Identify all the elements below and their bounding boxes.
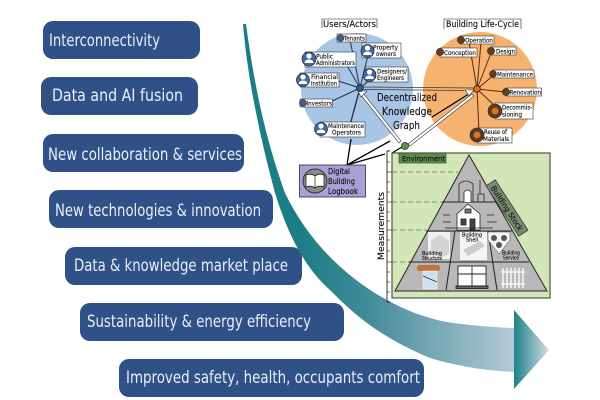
label: Reuse of Materials — [470, 128, 512, 143]
tag: Building Stock: Building Stock — [489, 184, 525, 233]
label: Financial Institution — [296, 73, 339, 88]
label: Public Administrators: Administrators — [316, 60, 355, 67]
axis label: Measurements: Measurements — [377, 192, 387, 260]
pill: Interconnectivity: Interconnectivity — [49, 31, 160, 51]
heading: Users/Actors: Users/Actors — [323, 20, 376, 30]
pill: Data and knowledge market place — [65, 247, 302, 285]
label: Public Administrators — [302, 52, 356, 67]
pill: New collaboration and services — [43, 134, 244, 172]
pill: Improved safety, health, occupants comfort — [119, 359, 424, 397]
label: Financial Institution: Financial — [311, 74, 338, 81]
image: building shell: Shell — [466, 238, 478, 244]
image: building structure: Structure — [422, 256, 442, 262]
pyramid: building stock — [395, 155, 547, 291]
hub: users — [356, 84, 364, 92]
panel: Digital Building Logbook — [300, 165, 366, 197]
connections: users spokes — [328, 40, 372, 125]
connections: life-cycle spokes — [469, 42, 505, 132]
label: Investors: Investors — [306, 100, 332, 108]
label: Tenants: Tenants — [343, 36, 365, 42]
knowledge graph diagram — [296, 19, 550, 302]
label: Decommissioning: sioning — [502, 112, 522, 118]
label: Conception: Conception — [444, 50, 476, 57]
heading: Building Life-Cycle: Building Life-Cycle — [446, 20, 519, 30]
text: Decentralized Knowledge Graph — [377, 91, 437, 132]
curved arrow shaft — [243, 24, 514, 372]
label: Maintenance Operators: Operators — [332, 130, 361, 136]
label: Design — [487, 47, 516, 56]
image: column — [417, 265, 440, 289]
pill: New technologies and innovation — [49, 190, 273, 228]
label: Designers/Engineers: Engineers — [377, 75, 404, 82]
label: Property owners — [361, 43, 401, 58]
label: Financial Institution: Institution — [311, 80, 337, 88]
image: building shell — [460, 232, 487, 260]
connection: hub to hub double line — [364, 87, 476, 90]
label: Design: Design — [496, 48, 515, 56]
label: Decommissioning: Decommis- — [502, 104, 532, 112]
panel: Digital Building Logbook: Building — [328, 177, 355, 186]
label: Designers/Engineers: Designers/ — [377, 68, 408, 76]
panel: Digital Building Logbook: Logbook — [328, 187, 359, 196]
connection: white double arrows to the green hub — [358, 90, 474, 146]
label: Operation: Operation — [465, 38, 493, 44]
image: building structure: Building — [422, 251, 442, 257]
tier: house — [443, 204, 497, 230]
hub: life-cycle — [474, 86, 480, 92]
label: Reuse of Materials: Reuse of — [484, 129, 508, 136]
label: Property owners: owners — [376, 51, 396, 58]
pill: Data and AI fusion: Data and AI fusion — [52, 86, 183, 106]
label: Investors — [299, 99, 332, 108]
image: building service — [488, 232, 520, 262]
pill: Data and knowledge market place: Data & knowledge market place — [74, 256, 288, 276]
label: Maintenance Operators — [314, 122, 365, 137]
hub: environment — [401, 142, 409, 150]
image: radiator — [501, 268, 525, 288]
label: Designers/Engineers — [363, 67, 408, 82]
dashed level lines — [392, 172, 458, 262]
image: window — [456, 266, 488, 288]
label: Operation — [457, 36, 494, 44]
label: Conception — [436, 48, 477, 57]
panel: Digital Building Logbook: Digital — [328, 167, 350, 176]
icon: book — [303, 169, 327, 193]
label: Property owners: Property — [373, 44, 398, 52]
text: Decentralized Knowledge Graph: Knowledge — [382, 105, 432, 118]
pill: Data and AI fusion — [41, 77, 198, 115]
label: Renovation: Renovation — [510, 90, 541, 96]
image: building shell: Building — [462, 232, 482, 238]
pill: New collaboration and services: New collaboration & services — [48, 145, 242, 165]
connection: logbook to hubs — [347, 92, 472, 165]
tag: Environment: Environment — [402, 155, 445, 163]
axis: measurements ruler — [387, 151, 392, 302]
label: Maintenance Operators: Maintenance — [328, 123, 364, 130]
pill: Sustainability and energy efficiency: Sustainability & energy efficiency — [87, 312, 311, 332]
circle: building life-cycle — [423, 32, 537, 146]
image: building service: Service — [503, 256, 519, 262]
label: Maintenance — [490, 70, 534, 78]
arrow head — [514, 310, 549, 389]
pill: New technologies and innovation: New technologies & innovation — [55, 201, 261, 221]
label: Decommissioning — [488, 103, 533, 119]
tier: landmark ruin — [459, 180, 484, 202]
circle: users and actors — [301, 33, 413, 145]
label: Public Administrators: Public — [316, 54, 334, 60]
label: Reuse of Materials: Materials — [483, 136, 509, 143]
label: Tenants — [337, 34, 366, 42]
pill: Interconnectivity — [43, 21, 200, 59]
pill: Improved safety, health, occupants comfort: Improved safety, health, occupants comfort — [126, 368, 420, 388]
image: building service: Building — [502, 250, 520, 256]
image: building structure — [422, 232, 450, 262]
label: Renovation — [502, 88, 542, 96]
panel: environment — [392, 153, 550, 298]
label: Maintenance: Maintenance — [497, 72, 533, 78]
text: Decentralized Knowledge Graph: Graph — [393, 119, 420, 132]
text: Decentralized Knowledge Graph: Decentralized — [377, 91, 437, 104]
pill: Sustainability and energy efficiency — [80, 303, 344, 341]
